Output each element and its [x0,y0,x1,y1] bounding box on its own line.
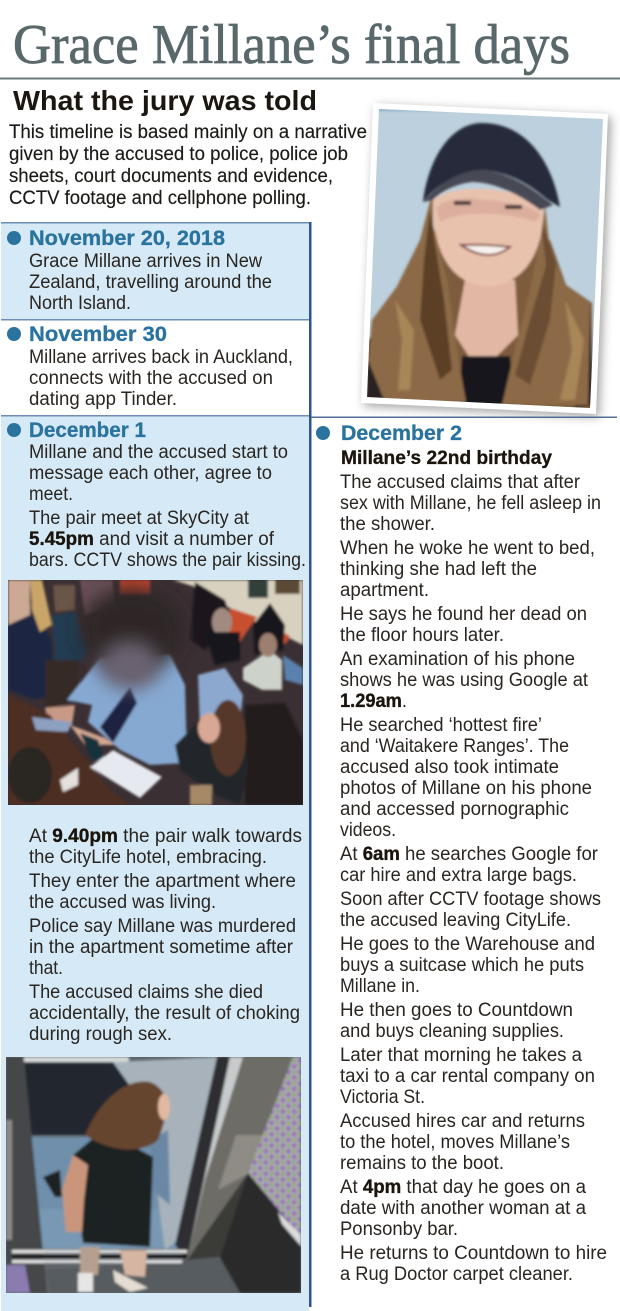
body text: hotel: the accused was living. [29,892,216,913]
body text: Millane arrives back in Auckland, [29,347,293,368]
body text: hotel: At 9.40pm the pair walk towards [29,826,302,847]
panel: November 30 [1,321,309,415]
CCTV photo: bar [8,580,303,805]
body text: accused also took intimate [340,757,559,778]
body text: car hire and extra large bags. [340,865,577,886]
body text: taxi to a car rental company on [340,1066,595,1087]
body text: hotel: that. [29,958,63,979]
date heading: November 30 [29,323,167,346]
body text: dating app Tinder. [29,389,177,410]
body text: hotel: during rough sex. [29,1024,172,1045]
body text: hotel: in the apartment sometime after [29,937,294,958]
subheading: What the jury was told [13,85,317,116]
portrait photo [360,100,611,420]
body text: first meeting [29,442,306,571]
body text [29,347,293,410]
body text: The accused claims that after [340,472,581,493]
body text: hotel [29,826,302,1045]
body text: He then goes to Countdown [340,1000,573,1021]
date heading: December 2 [341,422,462,445]
body text: and buys cleaning supplies. [340,1021,564,1042]
divider line between columns [309,222,312,1307]
body text: and ‘Waitakere Ranges’. The [340,736,569,757]
body text: connects with the accused on [29,368,273,389]
body text: When he woke he went to bed, [340,538,595,559]
intro text: sheets, court documents and evidence, [9,166,333,187]
body text: Later that morning he takes a [340,1045,582,1066]
body text: hotel: accidentally, the result of choking [29,1003,300,1024]
body text: first meeting: Millane and the accused start to [29,442,288,463]
body text: North Island. [29,293,131,314]
body text: hotel: Police say Millane was murdered [29,916,296,937]
title: Grace Millane’s final days [13,14,570,76]
body text: date with another woman at a [340,1198,586,1219]
intro text: given by the accused to police, police job [9,144,348,165]
birthday subheading: Millane’s 22nd birthday [341,447,552,469]
body text: the accused leaving CityLife. [340,910,571,931]
dot marker [7,327,21,341]
dot marker [7,423,21,437]
body text: buys a suitcase which he puts [340,955,584,976]
panel: December 2 [311,416,617,1285]
body text: a Rug Doctor carpet cleaner. [340,1264,573,1285]
intro text: This timeline is based mainly on a narrative [9,122,367,143]
body text: sex with Millane, he fell asleep in [340,493,601,514]
body text: hotel: the CityLife hotel, embracing. [29,847,267,868]
body text: hotel: They enter the apartment where [29,871,296,892]
body text: to the hotel, moves Millane’s [340,1132,570,1153]
date heading: November 20, 2018 [29,227,225,250]
body text: first meeting: bars. CCTV shows the pair kissing. [29,550,306,571]
body text: He returns to Countdown to hire [340,1243,607,1264]
dot marker [316,426,330,440]
body text [340,472,607,1285]
panel: December 1 [1,415,309,1311]
body text: Ponsonby bar. [340,1219,458,1240]
body text: and accessed pornographic [340,799,569,820]
body text: Grace Millane arrives in New [29,251,262,272]
body text: Victoria St. [340,1087,425,1108]
body text: Soon after CCTV footage shows [340,889,601,910]
CCTV photo: elevator [6,1057,301,1293]
body text: videos. [340,820,396,841]
intro text [9,122,367,209]
body text: At 6am he searches Google for [340,844,599,865]
body text: Millane in. [340,976,420,997]
body text: Accused hires car and returns [340,1111,585,1132]
body text: photos of Millane on his phone [340,778,592,799]
body text: first meeting: message each other, agree to [29,463,272,484]
body text: He goes to the Warehouse and [340,934,595,955]
date heading: December 1 [29,419,146,442]
body text [29,251,272,314]
body text: apartment. [340,580,429,601]
body text: first meeting: The pair meet at SkyCity at [29,508,250,529]
body text: shows he was using Google at [340,670,589,691]
body text: 1.29am. [340,691,407,712]
panel: November 20, 2018 [1,222,309,320]
body text: hotel: The accused claims she died [29,982,263,1003]
body text: first meeting: meet. [29,484,73,505]
body text: He says he found her dead on [340,604,587,625]
body text: Zealand, travelling around the [29,272,272,293]
dot marker [7,231,21,245]
intro text: CCTV footage and cellphone polling. [9,188,311,209]
body text: An examination of his phone [340,649,575,670]
body text: remains to the boot. [340,1153,504,1174]
body text: He searched ‘hottest fire’ [340,715,542,736]
body text: first meeting: 5.45pm and visit a number of [29,529,275,550]
body text: the floor hours later. [340,625,504,646]
body text: the shower. [340,514,435,535]
body text: thinking she had left the [340,559,537,580]
body text: At 4pm that day he goes on a [340,1177,586,1198]
